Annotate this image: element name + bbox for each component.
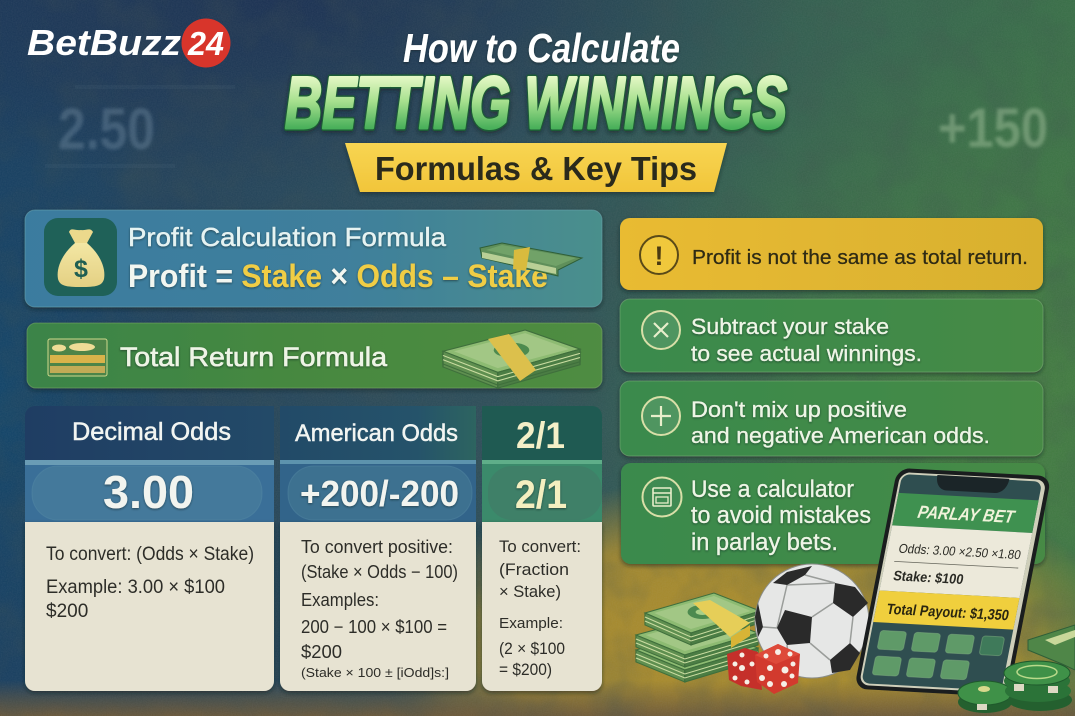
text: decimal conversion: $200 [46, 601, 88, 622]
illustration: right banknotes [1028, 625, 1075, 670]
tip: positive and negative odds [620, 381, 1043, 456]
text: american conversion [301, 537, 458, 680]
title: BETTING WINNINGS [285, 63, 787, 144]
text: fractional conversion: (2 × $100 [499, 639, 565, 658]
title [285, 25, 787, 144]
text: tip 4: Use a calculator [691, 476, 854, 503]
text: tip 4: in parlay bets. [691, 529, 838, 556]
column: american odds [280, 406, 476, 691]
subtitle banner [345, 143, 727, 192]
subtitle banner: Formulas & Key Tips [375, 150, 697, 187]
icon: exclamation: ! [654, 241, 664, 271]
tip: use a calculator [621, 463, 1045, 564]
text: american conversion: $200 [301, 642, 342, 662]
text: fractional conversion: = $200) [499, 660, 552, 679]
illustration: poker chips [958, 661, 1072, 713]
text: fractional conversion [499, 537, 581, 679]
text: decimal conversion: Example: 3.00 × $100 [46, 577, 225, 598]
text: tip 3: Don't mix up positive [691, 397, 907, 422]
text: fractional conversion: × Stake) [499, 582, 561, 601]
odds row: Odds: 3.00 ×2.50 ×1.80 [897, 541, 1022, 562]
text: american conversion: To convert positive: [301, 537, 453, 557]
text: american conversion: 200 − 100 × $100 = [301, 617, 447, 637]
heading: decimal odds: Decimal Odds [72, 418, 231, 446]
logo: 24 [187, 25, 224, 62]
text: tip 4: to avoid mistakes [691, 502, 871, 529]
illustration: banknote stacks [636, 593, 760, 682]
text: tip 2: to see actual winnings. [691, 341, 922, 366]
panel: profit calculation formula [25, 210, 602, 307]
tip: profit vs total return [620, 218, 1043, 290]
value: +200 / -200: +200/-200 [300, 473, 459, 514]
background ghost odds +150: +150 [938, 96, 1048, 159]
value: 3.00: 3.00 [103, 466, 194, 518]
text: american conversion: (Stake × 100 ± [iOdd]s:] [301, 665, 449, 680]
text: fractional conversion: Example: [499, 615, 563, 632]
heading: 2/1: 2/1 [516, 415, 565, 456]
background ghost odds 2.50: 2.50 [58, 97, 155, 162]
app icons [872, 630, 1005, 681]
column: fractional odds [482, 406, 602, 691]
logo [27, 18, 230, 68]
screen heading: PARLAY BET [916, 502, 1018, 527]
text: decimal conversion: To convert: (Odds × Stake) [46, 544, 254, 565]
icon: cross [642, 311, 680, 349]
logo: BetBuzz [27, 22, 181, 63]
column: decimal odds [25, 406, 274, 691]
text: american conversion: Examples: [301, 590, 379, 610]
value: 2/1: 2/1 [515, 473, 567, 517]
text: tip 1: Profit is not the same as total return. [692, 246, 1028, 269]
illustration: phone with parlay bet [854, 468, 1051, 697]
text: tip 4 [691, 476, 871, 556]
phone notch [935, 475, 1009, 494]
table: odds formats [25, 406, 602, 691]
text: tip 2 [691, 314, 922, 366]
text: fractional conversion: (Fraction [499, 560, 569, 579]
text: fractional conversion: To convert: [499, 537, 581, 556]
title: BETTING WINNINGS [285, 63, 787, 144]
tip: subtract your stake [620, 299, 1043, 372]
illustration: red dice [727, 644, 800, 694]
title: How to Calculate [403, 25, 680, 71]
heading: profit calculation formula: Profit Calculation Formula [128, 222, 447, 252]
icon: money bag [44, 218, 117, 296]
text: tip 3 [691, 397, 990, 448]
icon: plus [642, 397, 680, 435]
formula: profit: Profit = Stake × Odds – Stake [128, 258, 548, 294]
icon: exclamation [640, 236, 678, 274]
icon: banknote bundle [443, 330, 580, 388]
heading: total return formula: Total Return Formula [120, 342, 388, 372]
heading: american odds: American Odds [295, 420, 458, 447]
icon: calculator [642, 478, 682, 516]
text: american conversion: (Stake × Odds − 100) [301, 562, 458, 582]
text: tip 2: Subtract your stake [691, 314, 889, 339]
icon: banknotes [480, 243, 582, 276]
text: decimal conversion [46, 544, 254, 622]
illustration: soccer ball [755, 564, 869, 678]
panel: total return formula [27, 323, 602, 388]
stake row: Stake: $100 [892, 567, 965, 587]
text: tip 3: and negative American odds. [691, 423, 990, 448]
icon: cash stack [48, 339, 107, 376]
total payout row: Total Payout: $1,350 [885, 601, 1011, 624]
icon: money bag: $ [74, 255, 88, 283]
